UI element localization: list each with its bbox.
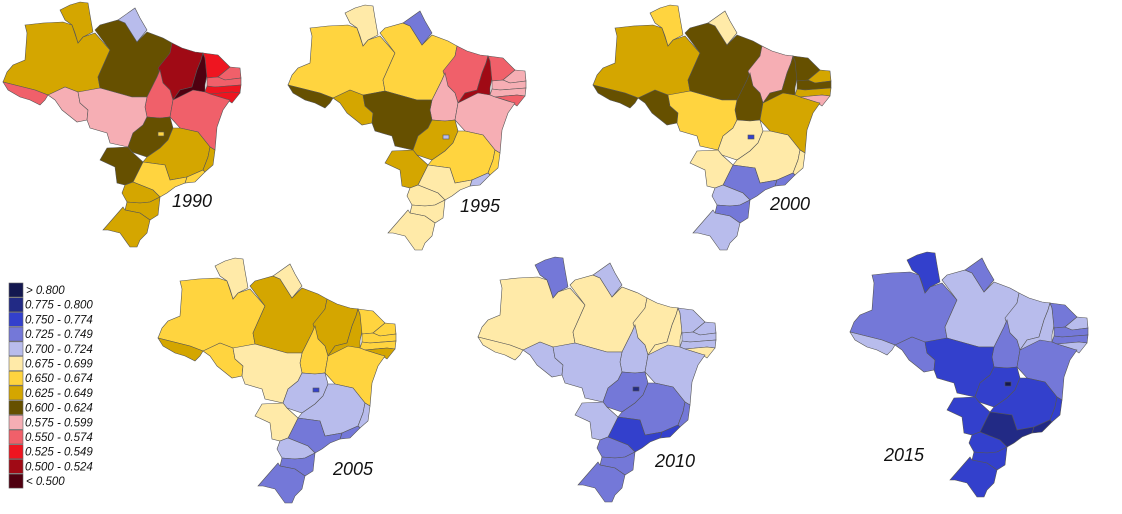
map: 2005 [158, 258, 396, 503]
legend: > 0.800 [26, 285, 65, 297]
label: 2010: 2010 [654, 451, 695, 471]
legend: < 0.500 [26, 476, 65, 488]
map: 1995 [288, 5, 526, 250]
legend: 0.625 - 0.649 [25, 388, 93, 400]
label: 1995: 1995 [460, 196, 501, 216]
map: 2010 [478, 257, 716, 502]
legend: 0.550 - 0.574 [25, 432, 93, 444]
map: 2000 [593, 5, 831, 250]
legend [9, 283, 93, 488]
map: 2015 [850, 252, 1088, 497]
map: 1990 [3, 2, 241, 247]
legend: 0.600 - 0.624 [25, 403, 93, 415]
legend: 0.775 - 0.800 [25, 300, 93, 312]
legend: 0.725 - 0.749 [25, 329, 93, 341]
legend: 0.650 - 0.674 [25, 373, 93, 385]
legend: 0.675 - 0.699 [25, 358, 93, 370]
legend: 0.525 - 0.549 [25, 447, 93, 459]
label: 1990: 1990 [172, 191, 212, 211]
label: 2005: 2005 [332, 459, 374, 479]
legend: 0.500 - 0.524 [25, 461, 93, 473]
label: 2015: 2015 [883, 445, 925, 465]
label: 2000: 2000 [769, 194, 810, 214]
legend: 0.575 - 0.599 [25, 417, 93, 429]
legend: 0.700 - 0.724 [25, 344, 93, 356]
legend: 0.750 - 0.774 [25, 314, 93, 326]
